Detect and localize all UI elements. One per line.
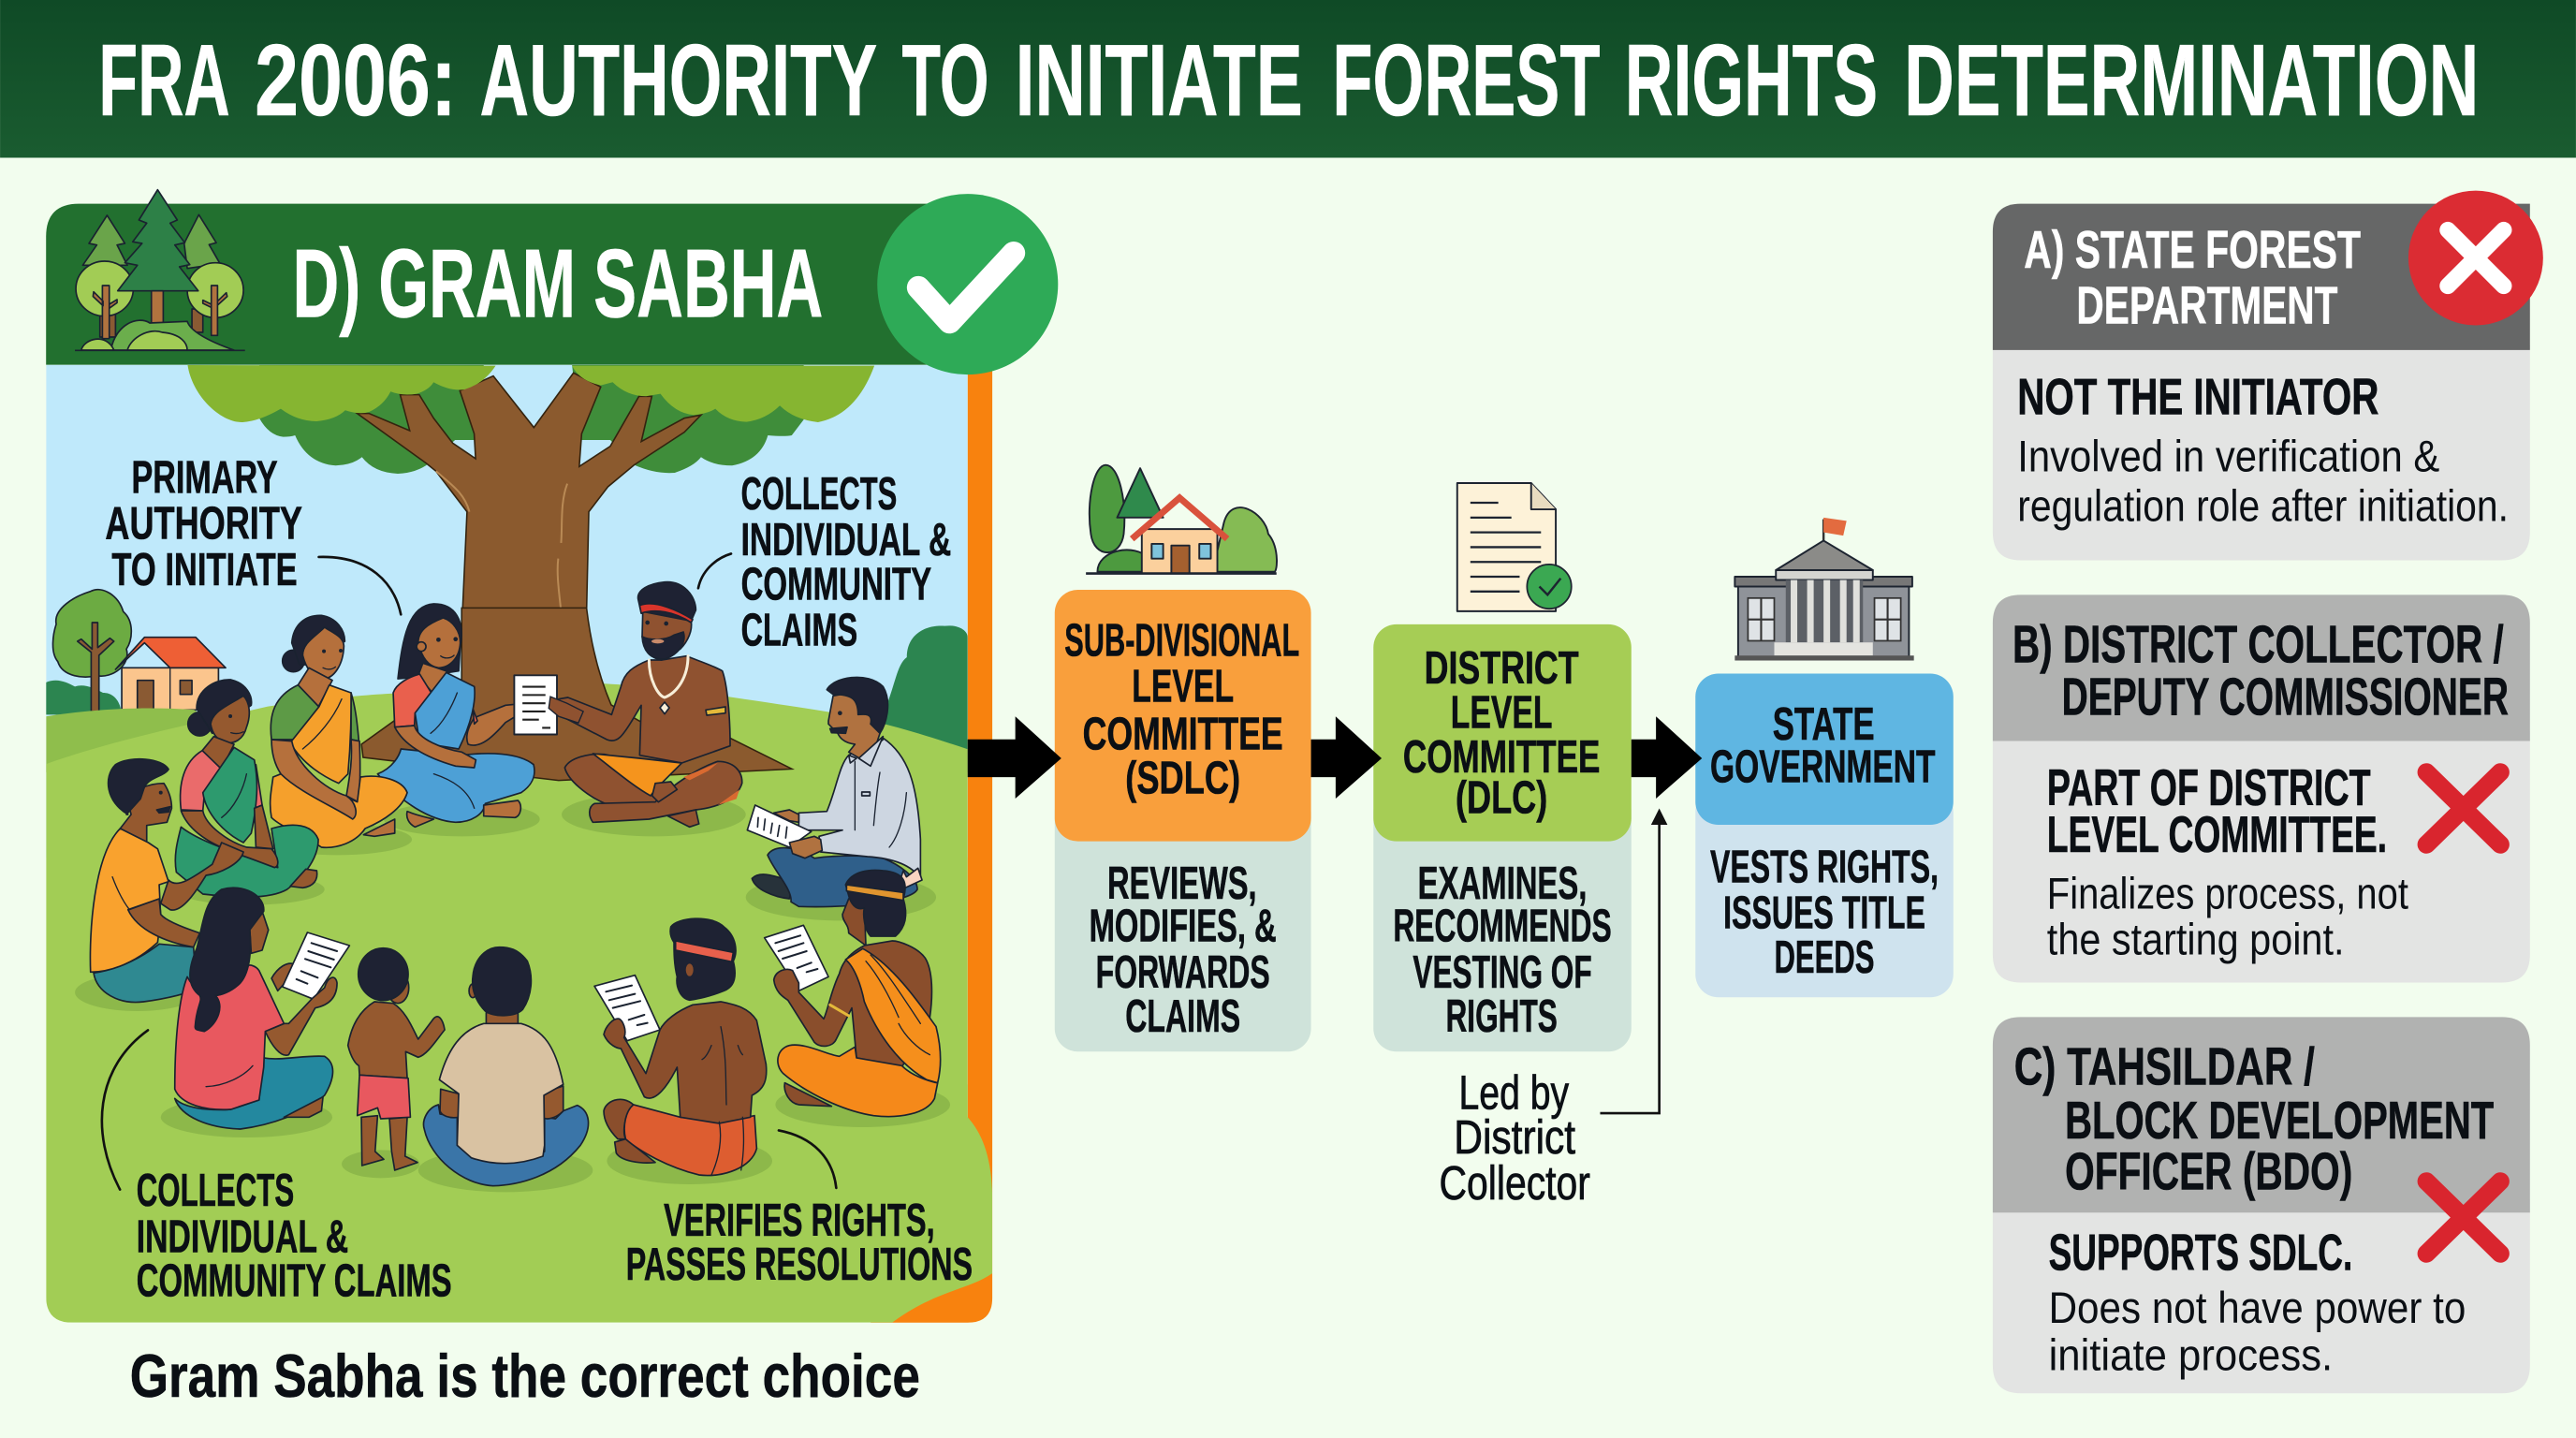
scene label: collects claims (lower): INDIVIDUAL &	[137, 1211, 348, 1262]
icon: village house	[1086, 465, 1277, 574]
card: A State Forest Department: regulation role after initiation.	[2017, 481, 2509, 531]
scene label: primary authority: TO INITIATE	[111, 545, 298, 595]
scene label: collects claims (upper): CLAIMS	[741, 606, 857, 656]
icon: red cross	[2426, 1181, 2500, 1254]
note: led by district collector: District	[1454, 1110, 1575, 1164]
box: Sub-Divisional Level Committee: COMMITTEE	[1083, 709, 1283, 759]
person: woman in orange sari	[262, 615, 412, 855]
card: B District Collector	[1993, 594, 2530, 983]
panel header: D) GRAM SABHA	[292, 229, 823, 338]
box: District Level Committee: LEVEL	[1451, 687, 1553, 738]
card: C Tahsildar / BDO: Does not have power to	[2049, 1284, 2466, 1333]
box: State Government: STATE	[1773, 699, 1875, 750]
scene label: verifies rights: PASSES RESOLUTIONS	[626, 1240, 973, 1290]
scene label: primary authority	[105, 453, 302, 595]
card: C Tahsildar / BDO: OFFICER (BDO)	[2065, 1142, 2352, 1201]
box: Sub-Divisional Level Committee: FORWARDS	[1096, 947, 1270, 998]
right background hill	[879, 625, 968, 772]
title banner	[0, 0, 2576, 157]
person: woman in blue sari	[377, 604, 540, 836]
card: C Tahsildar / BDO: initiate process.	[2049, 1331, 2333, 1381]
scene label: collects claims (lower)	[137, 1166, 452, 1307]
person: man in beige shirt	[418, 947, 593, 1192]
box: Sub-Divisional Level Committee: MODIFIES, &	[1090, 902, 1277, 952]
card: B District Collector: LEVEL COMMITTEE.	[2047, 806, 2387, 863]
person: woman in green sari	[175, 680, 325, 905]
card: B District Collector: PART OF DISTRICT	[2047, 759, 2371, 816]
box: District Level Committee: DISTRICT	[1425, 643, 1579, 694]
person: man with orange sash and paper	[765, 868, 950, 1127]
arrow: collector connector	[1600, 808, 1667, 1113]
box: District Level Committee: COMMITTEE	[1403, 732, 1600, 783]
note: led by district collector: Led by	[1459, 1066, 1570, 1120]
title banner: TO	[902, 23, 989, 138]
title banner: INITIATE	[1016, 23, 1303, 138]
card: B District Collector: Finalizes process, not	[2047, 870, 2408, 919]
icon: forest	[75, 190, 245, 350]
person: child	[342, 948, 445, 1178]
scene: village meeting under tree	[44, 365, 992, 1323]
note: led by district collector: Collector	[1439, 1156, 1590, 1210]
scene label: collects claims (lower): COLLECTS	[137, 1166, 294, 1216]
arrow: DLC to State	[1632, 716, 1702, 799]
box: State Government: VESTS RIGHTS,	[1710, 842, 1939, 892]
person: bearded elder	[555, 582, 746, 836]
panel header	[46, 190, 968, 365]
card: B District Collector: the starting point.	[2047, 916, 2344, 965]
scene label: primary authority: PRIMARY	[131, 453, 278, 504]
orange panel edge	[871, 353, 992, 1323]
card: A State Forest Department: NOT THE INITIATOR	[2017, 368, 2378, 425]
card: C Tahsildar / BDO: SUPPORTS SDLC.	[2049, 1225, 2352, 1282]
panel: Gram Sabha correct answer	[44, 190, 1058, 1323]
scene label: collects claims (upper): INDIVIDUAL &	[741, 515, 951, 565]
box: District Level Committee: RECOMMENDS	[1393, 902, 1612, 952]
card: C Tahsildar / BDO: C) TAHSILDAR /	[2014, 1036, 2315, 1095]
callout lines	[102, 553, 836, 1190]
left meadow hill	[46, 708, 198, 772]
card: C Tahsildar / BDO	[1993, 1017, 2530, 1393]
person: official in grey shirt	[746, 677, 936, 920]
scene label: collects claims (upper): COLLECTS	[741, 469, 897, 520]
card: A State Forest Department: A) STATE FOREST	[2024, 220, 2361, 279]
grass	[46, 683, 992, 1323]
card: A State Forest Department	[1993, 191, 2543, 560]
box: State Government: ISSUES TITLE	[1723, 888, 1925, 939]
title banner: RIGHTS	[1625, 23, 1878, 138]
title banner: FOREST	[1332, 23, 1600, 138]
box: District Level Committee: VESTING OF	[1412, 947, 1592, 998]
icon: red cross	[2426, 772, 2500, 844]
icon: document with check	[1457, 483, 1572, 611]
box: Sub-Divisional Level Committee: SUB-DIVISIONAL	[1064, 615, 1299, 666]
scene label: primary authority: AUTHORITY	[105, 499, 302, 550]
scene label: verifies rights	[626, 1196, 973, 1290]
tree	[187, 365, 874, 781]
box: District Level Committee	[1373, 624, 1632, 1051]
box: Sub-Divisional Level Committee	[1055, 590, 1311, 1051]
note: led by district collector	[1439, 1066, 1590, 1210]
box: Sub-Divisional Level Committee: CLAIMS	[1125, 991, 1240, 1042]
box: State Government	[1695, 674, 1954, 997]
title banner: 2006:	[255, 23, 457, 138]
card: A State Forest Department: Involved in verification &	[2017, 433, 2439, 482]
box: District Level Committee: RIGHTS	[1445, 991, 1558, 1042]
box: Sub-Divisional Level Committee: (SDLC)	[1125, 754, 1240, 804]
box: District Level Committee: EXAMINES,	[1418, 858, 1587, 909]
icon: green check badge	[877, 194, 1058, 374]
arrow: SDLC to DLC	[1311, 716, 1382, 799]
box: District Level Committee: (DLC)	[1456, 773, 1547, 824]
caption: correct choice: Gram Sabha is the correct choice	[130, 1342, 920, 1410]
box: State Government: DEEDS	[1774, 932, 1875, 983]
person: man with headband and paper	[594, 918, 772, 1184]
scene label: collects claims (lower): COMMUNITY CLAIMS	[137, 1256, 452, 1307]
document handed over	[514, 675, 583, 734]
person: man in orange shirt	[75, 759, 243, 1011]
box: State Government: GOVERNMENT	[1710, 741, 1935, 792]
icon: government building	[1734, 518, 1914, 661]
scene label: collects claims (upper): COMMUNITY	[741, 560, 931, 610]
box: Sub-Divisional Level Committee: LEVEL	[1132, 661, 1234, 712]
title banner: AUTHORITY	[480, 23, 877, 138]
scene label: verifies rights: VERIFIES RIGHTS,	[664, 1196, 935, 1246]
icon: red cross badge	[2408, 191, 2543, 325]
background house and tree	[44, 590, 226, 714]
scene label: collects claims (upper)	[741, 469, 951, 656]
arrow: Gram Sabha to SDLC	[968, 716, 1061, 799]
title banner: FRA	[98, 23, 230, 138]
card: A State Forest Department: DEPARTMENT	[2076, 276, 2337, 335]
person: woman in pink with paper	[161, 888, 349, 1137]
box: Sub-Divisional Level Committee: REVIEWS,	[1107, 858, 1257, 909]
